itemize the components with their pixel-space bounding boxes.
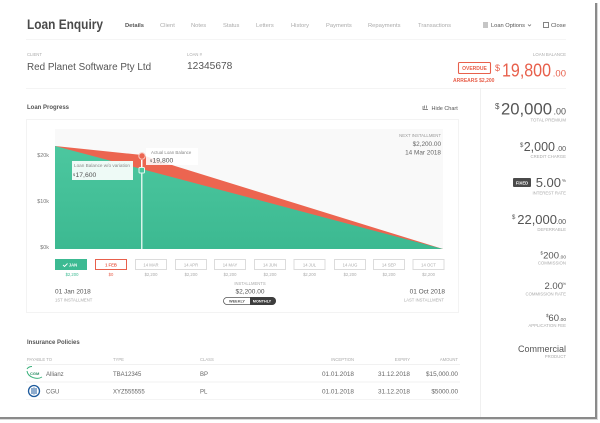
navigation tabs: Letters: [256, 23, 274, 29]
sidebar: total premium: .00: [553, 106, 566, 116]
last installment: 01 Oct 2018: [410, 288, 445, 296]
client: [27, 52, 151, 73]
navigation tabs: Payments: [326, 23, 352, 29]
hide chart button: [423, 106, 458, 112]
row: Allianz: Allianz: [46, 372, 64, 378]
navigation tabs: Details: [125, 23, 144, 29]
navigation tabs: [125, 23, 451, 29]
close button: [544, 22, 566, 29]
tooltip: actual loan balance: [146, 148, 198, 165]
row: CGU: 01.01.2018: [322, 388, 354, 396]
first installment: 01 Jan 2018: [55, 288, 91, 296]
sidebar: total premium: TOTAL PREMIUM: [530, 118, 566, 122]
sidebar: product: [518, 344, 566, 359]
sidebar: credit charge: .00: [556, 146, 566, 153]
sidebar: commission rate: 2.00: [544, 281, 563, 292]
installment boxes: 14 SEP: [382, 262, 396, 268]
installment boxes: 1 FEB: [105, 262, 117, 268]
row: CGU: PL: [200, 390, 208, 396]
sidebar: credit charge: [520, 140, 566, 159]
tooltip: balance without variation: 17,600: [76, 172, 97, 179]
sidebar: deferrable: $: [512, 215, 516, 221]
last installment: LAST INSTALLMENT: [404, 298, 444, 302]
installment boxes: JAN: [69, 262, 77, 268]
weekly monthly toggle: [224, 297, 276, 305]
loan balance: 19,800: [502, 60, 551, 80]
navigation tabs: Transactions: [418, 23, 451, 29]
installments total: INSTALLMENTS: [234, 281, 266, 286]
row: CGU: XYZ555555: [113, 390, 145, 396]
sidebar: deferrable: .00: [556, 219, 566, 226]
sidebar: deferrable: [512, 212, 566, 232]
loan number: LOAN #: [187, 52, 203, 57]
table header: [27, 357, 458, 362]
row: Allianz: BP: [200, 372, 208, 378]
client: Red Planet Software Pty Ltd: [27, 62, 151, 73]
section heading: loan progress: Loan Progress: [27, 105, 70, 111]
row: CGU: [28, 386, 458, 396]
loan balance: $: [495, 63, 500, 73]
first installment: [55, 288, 93, 302]
row: Allianz: TBA12345: [113, 372, 142, 378]
sidebar: credit charge: 2,000: [524, 140, 555, 154]
loan balance: OVERDUE: [462, 66, 488, 72]
last installment: [404, 288, 445, 302]
row: Allianz: 31.12.2018: [378, 371, 410, 378]
tooltip: actual loan balance: $: [150, 159, 153, 163]
first installment: 1ST INSTALLMENT: [55, 298, 93, 302]
sidebar: interest rate: INTEREST RATE: [532, 190, 566, 196]
sidebar: interest rate: %: [562, 178, 566, 183]
y axis labels: $0k: [40, 245, 49, 251]
table header: PAYABLE TO: [27, 357, 53, 362]
area: actual loan balance: [55, 146, 443, 249]
installment boxes: $0: [109, 272, 114, 277]
navigation tabs: Repayments: [368, 23, 401, 29]
loan balance: [453, 52, 566, 84]
installment boxes: $2,200: [224, 272, 237, 277]
installment boxes: $2,200: [185, 272, 198, 277]
weekly monthly toggle: MONTHLY: [253, 300, 272, 304]
installment boxes: $2,200: [303, 272, 317, 277]
row: CGU: CGU: [46, 390, 59, 396]
row: Allianz: [27, 366, 458, 378]
sidebar: application fee: [528, 313, 566, 328]
loan number: 12345678: [187, 61, 233, 72]
sidebar: commission: [538, 250, 566, 266]
installment boxes: $2,200: [344, 272, 357, 277]
sidebar: commission rate: [525, 281, 566, 296]
tooltip: actual loan balance: Actual Loan Balance: [151, 150, 192, 155]
loan options menu: Loan Options: [491, 23, 525, 29]
tooltip: balance without variation: $: [73, 173, 76, 177]
installment boxes: $2,200: [264, 272, 277, 277]
sidebar: credit charge: CREDIT CHARGE: [530, 154, 566, 159]
hide chart button: Hide Chart: [432, 106, 458, 112]
installment boxes: 14 MAR: [143, 262, 159, 268]
installment boxes: 14 JUL: [303, 262, 317, 268]
table header: INCEPTION: [331, 357, 354, 362]
sidebar: interest rate: FIXED: [516, 180, 528, 185]
installment boxes: 14 JUN: [263, 262, 277, 268]
sidebar: commission: $: [540, 250, 544, 256]
installment boxes: [55, 259, 444, 277]
close button: Close: [551, 23, 566, 29]
area: loan balance w/o variation: [55, 146, 443, 249]
sidebar: deferrable: 22,000: [517, 212, 557, 227]
y axis labels: [37, 153, 49, 251]
sidebar: deferrable: DEFERRABLE: [537, 227, 566, 232]
sidebar: total premium: [495, 100, 566, 122]
installments total: $2,200.00: [236, 288, 265, 296]
tooltip: actual loan balance: 19,800: [152, 158, 174, 164]
loan number: [187, 52, 233, 72]
sidebar: commission: COMMISSION: [538, 260, 566, 266]
next installment: [399, 133, 441, 156]
marker line: [139, 153, 145, 249]
sidebar: commission: .00: [559, 254, 566, 260]
y axis labels: $10k: [37, 199, 49, 205]
sidebar: commission rate: %: [562, 281, 566, 286]
sidebar: total premium: $: [495, 102, 500, 111]
navigation tabs: Notes: [191, 23, 206, 29]
sidebar: application fee: .00: [559, 317, 566, 323]
navigation tabs: Status: [223, 23, 240, 29]
table header: EXPIRY: [395, 357, 410, 362]
row: Allianz: 01.01.2018: [322, 371, 354, 378]
sidebar: interest rate: 5.00: [536, 175, 561, 190]
table: insurance policies: [26, 357, 460, 400]
sidebar: commission: 200: [543, 250, 559, 262]
navigation tabs: History: [291, 23, 309, 29]
installment boxes: $2,200: [66, 272, 79, 277]
section heading: insurance policies: Insurance Policies: [27, 340, 80, 346]
sidebar: product: PRODUCT: [545, 354, 566, 359]
sidebar: application fee: APPLICATION FEE: [528, 323, 566, 328]
next installment: $2,200.00: [413, 141, 441, 148]
row: CGU: $5000.00: [431, 388, 458, 396]
loan balance: LOAN BALANCE: [533, 52, 566, 57]
sidebar: product: Commercial: [518, 344, 566, 354]
installment boxes: $2,200: [145, 272, 158, 277]
row: CGU: 31.12.2018: [378, 388, 410, 396]
sidebar: commission rate: COMMISSION RATE: [525, 292, 566, 296]
sidebar: interest rate: [513, 175, 566, 196]
title: Loan Enquiry: [27, 17, 103, 32]
next installment: 14 Mar 2018: [405, 150, 441, 156]
sidebar: credit charge: $: [520, 143, 524, 149]
sidebar: application fee: 60: [548, 313, 559, 324]
row: Allianz: CGM: [30, 371, 40, 376]
weekly monthly toggle: WEEKLY: [229, 300, 245, 304]
tooltip: balance without variation: Loan Balance w/o variation: [74, 163, 131, 168]
table header: AMOUNT: [440, 357, 458, 362]
installments total: [234, 281, 266, 296]
sidebar: application fee: $: [546, 313, 549, 318]
installment boxes: $2,200: [383, 272, 396, 277]
panel: loan progress chart: [26, 120, 458, 312]
next installment: NEXT INSTALLMENT: [399, 133, 441, 138]
installment boxes: 14 APR: [184, 262, 198, 268]
client: CLIENT: [27, 52, 42, 57]
tooltip: balance without variation: [72, 161, 133, 180]
navigation tabs: Client: [160, 23, 175, 29]
loan balance: ARREARS $2,200: [453, 78, 495, 84]
sidebar: total premium: 20,000: [501, 100, 552, 118]
table header: CLASS: [200, 357, 214, 362]
y axis labels: $20k: [37, 153, 49, 159]
table header: TYPE: [113, 357, 124, 362]
installment boxes: 14 MAY: [223, 262, 237, 268]
row: Allianz: $15,000.00: [426, 371, 458, 378]
installment boxes: 14 AUG: [343, 262, 357, 268]
installment boxes: 14 OCT: [421, 262, 436, 268]
loan balance: .00: [553, 68, 566, 80]
installment boxes: $2,200: [422, 272, 436, 277]
